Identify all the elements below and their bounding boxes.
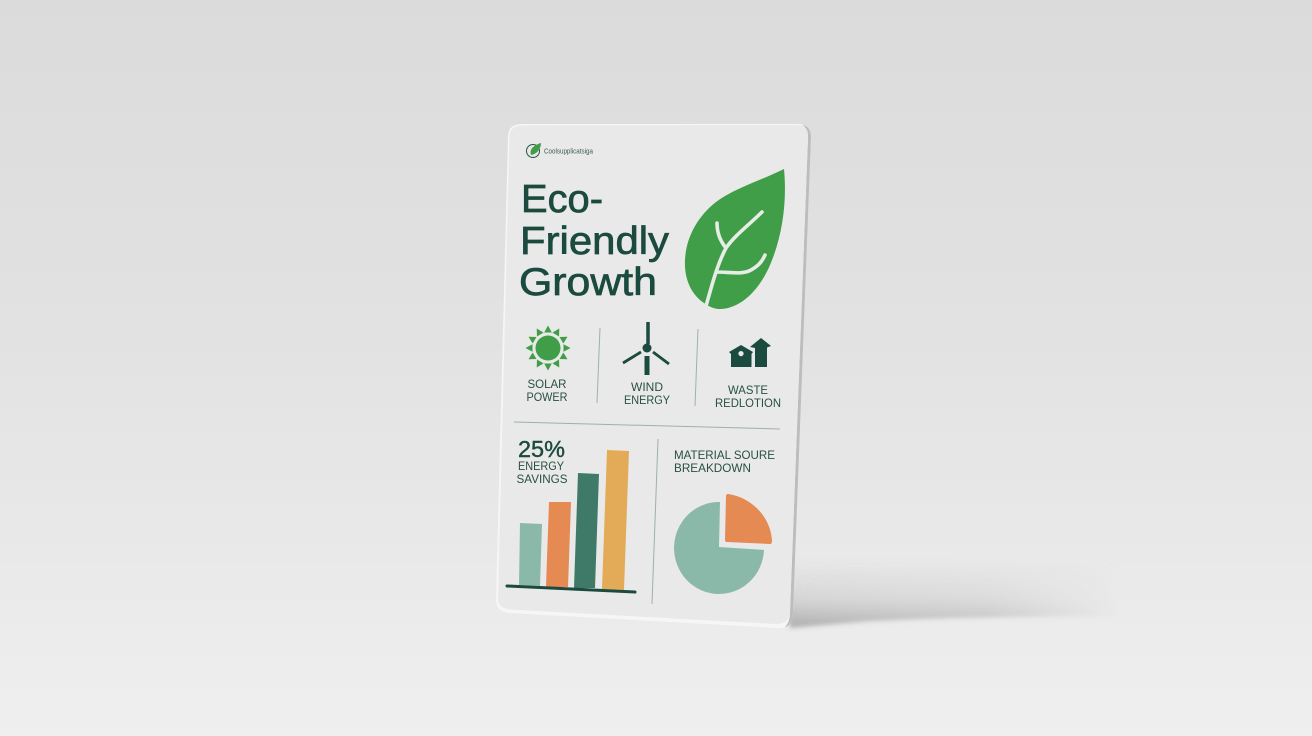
icon: houses	[729, 338, 771, 367]
pie chart	[674, 494, 772, 594]
stat: 25% energy savings: SAVINGS	[516, 474, 568, 486]
icon: leaf	[685, 169, 785, 309]
label: wind energy: ENERGY	[624, 395, 670, 407]
heading: material source breakdown: MATERIAL SOURE	[674, 448, 775, 462]
card face	[498, 125, 808, 624]
heading: material source breakdown: BREAKDOWN	[674, 461, 751, 475]
label: wind energy: WIND	[631, 382, 663, 394]
card shadow	[788, 574, 1082, 630]
stat: 25% energy savings: ENERGY	[518, 461, 564, 473]
title: Eco-	[521, 178, 603, 221]
label: solar power	[526, 379, 568, 404]
title: Friendly	[520, 220, 670, 263]
heading: material source breakdown	[674, 448, 775, 475]
icon: wind turbine	[623, 322, 669, 375]
label: waste reduction: WASTE	[728, 385, 768, 397]
card right side	[785, 125, 811, 627]
title	[519, 178, 670, 304]
card edge	[496, 124, 811, 628]
stat: 25% energy savings: 25%	[518, 436, 565, 462]
label: waste reduction: REDLOTION	[715, 398, 781, 410]
stat: 25% energy savings	[516, 436, 568, 486]
icon: sun	[526, 326, 570, 370]
card	[496, 124, 811, 628]
title: Growth	[519, 261, 657, 304]
brand name: Coolsupplicatsiga	[544, 146, 594, 156]
label: waste reduction	[715, 385, 781, 410]
label: solar power: POWER	[526, 392, 568, 404]
brand logo	[526, 143, 541, 158]
label: solar power: SOLAR	[528, 379, 566, 391]
label: wind energy	[624, 382, 670, 407]
bar chart	[507, 450, 635, 592]
